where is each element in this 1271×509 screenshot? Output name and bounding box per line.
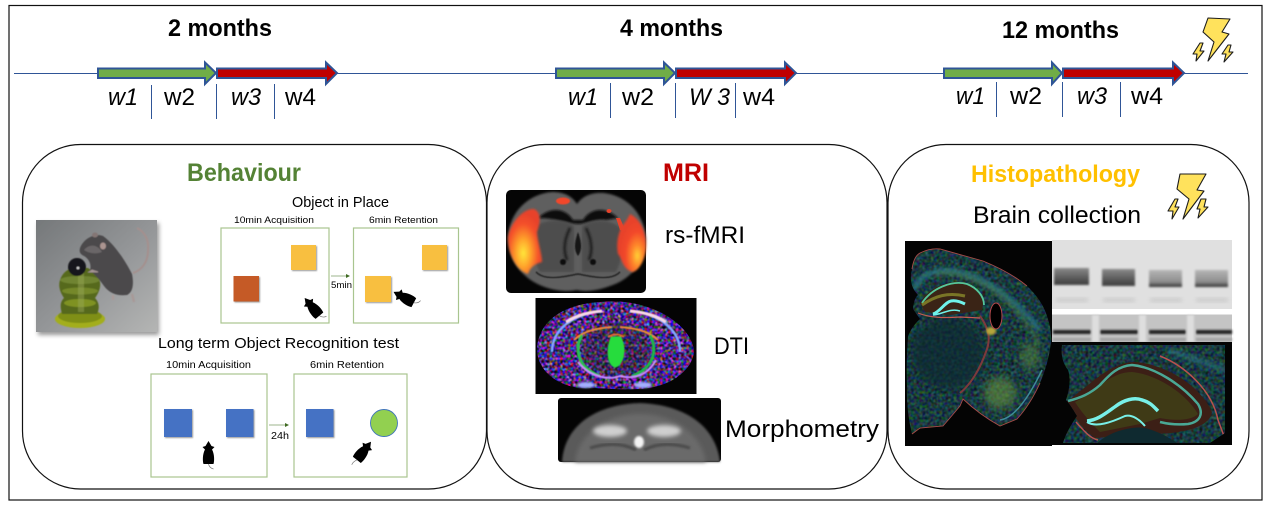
test: Long term Object Recognition [151,336,407,477]
label: Morphometry: Morphometry [725,416,879,443]
object base and rings [55,310,105,328]
arena: retention [294,374,407,477]
week labels [108,84,316,111]
label: 6min Retention: 6min Retention [310,360,384,371]
arrow: red, weeks 3-4 [217,62,337,84]
week labels: w4 [284,84,316,111]
week labels: w4 [742,84,775,111]
test: Object in Place [221,195,458,323]
heading: Object in Place: Object in Place [292,195,389,211]
week labels: w1 [108,84,138,111]
arrow: green, weeks 1-2 [98,62,216,84]
week labels: W 3 [689,84,731,111]
panel: behaviour [22,144,486,489]
arena: acquisition [221,228,329,323]
week labels: w1 [956,83,985,110]
week labels: w2 [163,84,195,111]
timepoint: 12 months [944,17,1184,117]
arrow: 24 h delay: 24h [271,430,289,442]
timepoint: 2 months [98,15,337,119]
image: rs-fMRI brain [506,190,646,293]
timepoint: 4 months [556,15,796,118]
week labels: w4 [1130,83,1163,110]
label: 10min Acquisition: 10min Acquisition [234,215,314,226]
image: western blot, top [1052,240,1232,309]
heading: MRI: MRI [663,159,709,187]
heading: 4 months: 4 months [620,15,723,42]
image: western blot, bottom [1052,314,1232,342]
panel: MRI [487,144,887,489]
icon: mouse [391,287,421,310]
week labels: w2 [621,84,654,111]
arrow: red, weeks 3-4 [1063,62,1184,84]
week labels: w2 [1009,83,1042,110]
heading: Behaviour: Behaviour [187,159,301,187]
label: rs-fMRI: rs-fMRI [665,222,745,249]
label: 10min Acquisition: 10min Acquisition [166,360,251,371]
icon: mouse [348,438,376,469]
arrow: green, weeks 1-2 [556,62,675,84]
image: hippocampus close-up [1052,342,1232,445]
week labels [956,83,1163,110]
timeline axis [14,72,1248,74]
icon: lightning bolts, histopathology [1168,174,1208,219]
arrow: red, weeks 3-4 [676,62,796,84]
arrow: 24 h delay [269,423,289,442]
heading: 2 months: 2 months [168,15,272,42]
image: morphometry brain [558,398,721,462]
arrow: 5 min delay [331,274,352,291]
mouse body [80,235,133,295]
photo: mouse on green object [36,220,157,332]
panel: histopathology [888,144,1249,489]
icon: mouse [300,294,327,323]
week labels: w1 [568,84,598,111]
arrow: green, weeks 1-2 [944,62,1062,84]
label: 6min Retention: 6min Retention [369,215,438,226]
image: whole brain section [905,241,1052,446]
image: DTI brain [535,298,697,394]
icon: mouse [202,441,214,469]
label: DTI: DTI [714,333,749,360]
week labels [568,84,775,111]
icon: lightning bolts, timeline [1193,18,1233,62]
week labels: w3 [1077,83,1108,110]
heading: Histopathology: Histopathology [971,161,1141,188]
week labels: w3 [231,84,262,111]
arena: retention [354,228,458,323]
arrow: 5 min delay: 5min [331,280,352,291]
arena: acquisition [151,374,267,477]
heading: 12 months: 12 months [1002,17,1119,44]
heading: Long term Object Recognition test: Long term Object Recognition test [158,336,399,352]
text: Brain collection: Brain collection [973,202,1141,229]
